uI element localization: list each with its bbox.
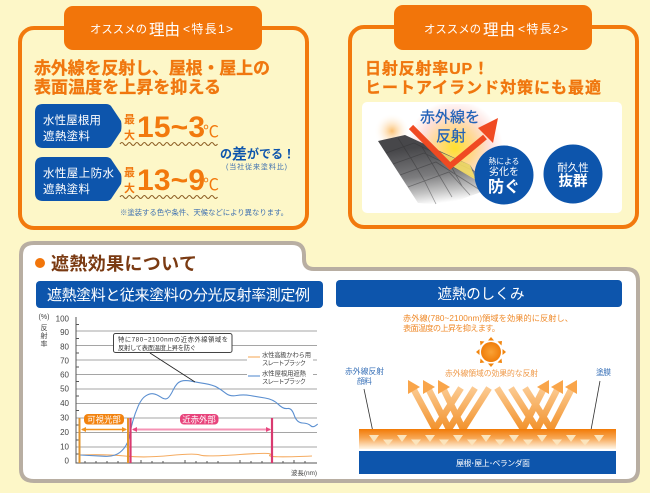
badge: prevents heat degradation: 防ぐ <box>488 178 520 196</box>
range: near infrared <box>130 414 272 463</box>
heading: feature 2: ヒートアイランド対策にも最適 <box>365 78 601 97</box>
badge: prevents heat degradation: 熱による <box>489 156 519 166</box>
value: roof paint 15-3: ℃ <box>203 124 219 141</box>
arrows: right reflection group <box>497 388 571 429</box>
label: roof paint <box>35 104 122 148</box>
label: rooftop waterproof paint: 水性屋上防水 <box>43 166 114 180</box>
y axis labels: 100 <box>56 314 70 324</box>
note: ※塗装する色や条件、天候などにより異なります。 <box>120 208 288 217</box>
label: reflective pigment: 顔料 <box>357 376 372 386</box>
badge: outstanding durability: 耐久性 <box>557 161 589 174</box>
bar: chart heading: 遮熱塗料と従来塗料の分光反射率測定例 <box>47 287 310 304</box>
tab: feature 1 heading: <特長1> <box>183 21 233 36</box>
callout: difference: がでる！ <box>247 146 295 161</box>
bar: chart heading <box>36 281 323 308</box>
value: roof paint 15-3 <box>120 111 219 146</box>
value: roof paint 15-3: 最 <box>124 113 135 126</box>
heading: feature 1: 赤外線を反射し、屋根・屋上の <box>34 59 270 78</box>
value: rooftop paint 13-9: ℃ <box>203 177 219 194</box>
range: near infrared: 近赤外部 <box>182 414 216 424</box>
range: visible light: 可視光部 <box>87 414 121 424</box>
label: coating film <box>591 367 611 430</box>
text: mechanism description: 赤外線(780~2100nm)領域を効果的に反射し、 <box>403 313 573 323</box>
y axis labels: 70 <box>60 356 70 366</box>
value: rooftop paint 13-9: 最 <box>124 166 135 179</box>
section title: 遮熱効果について <box>51 254 197 274</box>
value: roof paint 15-3: 大 <box>124 128 135 142</box>
badge: outstanding durability <box>544 144 602 204</box>
y axis title: (%) <box>39 314 49 321</box>
panel: heat shielding effect <box>21 243 638 481</box>
y axis labels <box>56 314 70 466</box>
arrows: left reflection group <box>414 388 489 429</box>
tab: feature 2 heading: オススメの <box>424 23 481 36</box>
y axis title: 率 <box>40 340 48 348</box>
callout: difference: の <box>220 147 232 161</box>
callout: difference <box>220 145 295 171</box>
y axis labels: 50 <box>60 384 70 394</box>
legend: スレートブラック <box>262 358 306 367</box>
grid lines <box>76 331 317 447</box>
y axis labels: 30 <box>60 414 70 422</box>
illustration: reflecting roof: 赤外線を <box>420 109 480 126</box>
image panel <box>362 102 622 213</box>
legend: 水性高級かわら用 <box>262 350 311 359</box>
y axis labels: 20 <box>60 428 70 437</box>
y axis labels: 90 <box>60 328 70 337</box>
label: roof paint: 遮熱塗料 <box>43 129 90 143</box>
y axis title: 射 <box>40 331 48 340</box>
callout: near infrared note: 反射して表面温度上昇を防ぐ <box>118 343 196 352</box>
tab: feature 1 heading: 理由 <box>149 21 180 39</box>
coating layer <box>359 429 616 449</box>
y axis labels: 60 <box>60 370 70 380</box>
badge: prevents heat degradation <box>474 146 534 204</box>
label: rooftop waterproof paint: 遮熱塗料 <box>43 182 90 196</box>
arrowheads: left group <box>408 380 450 394</box>
illustration: reflecting roof <box>374 104 503 205</box>
legend <box>247 350 313 386</box>
value: roof paint 15-3: 15~3 <box>137 111 205 144</box>
y axis labels: 0 <box>65 456 70 466</box>
y axis labels: 10 <box>60 442 70 452</box>
series: conventional paint <box>80 453 312 457</box>
label: effective reflection: 赤外線領域の効果的な反射 <box>445 368 538 378</box>
illustration: reflecting roof: 反射 <box>436 128 466 145</box>
panel: feature 2 <box>350 5 637 227</box>
bar: mechanism heading: 遮熱のしくみ <box>438 286 524 303</box>
bar: mechanism heading <box>336 280 622 307</box>
line chart: spectral reflectance <box>39 314 318 477</box>
callout: difference: (当社従来塗料比) <box>226 162 287 171</box>
badge: prevents heat degradation: 劣化を <box>489 165 519 178</box>
y axis labels: 40 <box>60 399 70 408</box>
tab: feature 2 heading <box>394 5 592 50</box>
tab: feature 2 heading: <特長2> <box>518 21 568 36</box>
text: mechanism description: 表面温度の上昇を抑えます。 <box>403 323 500 333</box>
label: reflective pigment: 赤外線反射 <box>345 366 384 376</box>
text: mechanism description <box>403 313 573 333</box>
axes <box>76 317 317 463</box>
tab: feature 1 heading: オススメの <box>90 23 147 36</box>
panel: feature 1 <box>20 6 307 228</box>
tab: feature 1 heading <box>64 6 262 50</box>
heading: feature 2 <box>365 60 601 97</box>
label: roof paint: 水性屋根用 <box>43 113 101 127</box>
tab: feature 2 heading: 理由 <box>483 21 515 39</box>
substrate layer <box>359 451 616 474</box>
callout: difference: 差 <box>232 145 247 163</box>
series: heat shielding paint <box>80 381 318 456</box>
value: rooftop paint 13-9 <box>120 164 219 198</box>
callout: near infrared note: 特に780~2100nmの近赤外線領域を <box>118 334 228 344</box>
heading: feature 1 <box>34 59 270 97</box>
diagram: heat reflection <box>345 337 616 474</box>
heading: feature 1: 表面温度を上昇を抑える <box>34 78 221 97</box>
y axis labels: 80 <box>60 342 70 352</box>
x axis title: 波長(nm) <box>291 468 317 477</box>
badge: outstanding durability: 抜群 <box>558 172 588 190</box>
value: rooftop paint 13-9: 13~9 <box>137 164 205 197</box>
legend: 水性屋根用遮熱 <box>262 368 307 378</box>
y axis title <box>39 314 49 348</box>
heading: feature 2: 日射反射率UP！ <box>365 60 489 78</box>
arrowheads: right group <box>537 380 577 394</box>
callout: near infrared note <box>114 334 232 382</box>
label: reflective pigment <box>345 366 384 437</box>
value: rooftop paint 13-9: 大 <box>124 181 135 195</box>
range: visible light <box>80 414 128 463</box>
label: coating film: 塗膜 <box>596 367 611 377</box>
legend: スレートブラック <box>262 376 306 386</box>
substrate layer: 屋根･屋上･ベランダ面 <box>456 458 530 468</box>
y axis title: 反 <box>40 324 48 332</box>
icon: sun <box>476 337 506 367</box>
label: rooftop waterproof paint <box>35 157 122 201</box>
